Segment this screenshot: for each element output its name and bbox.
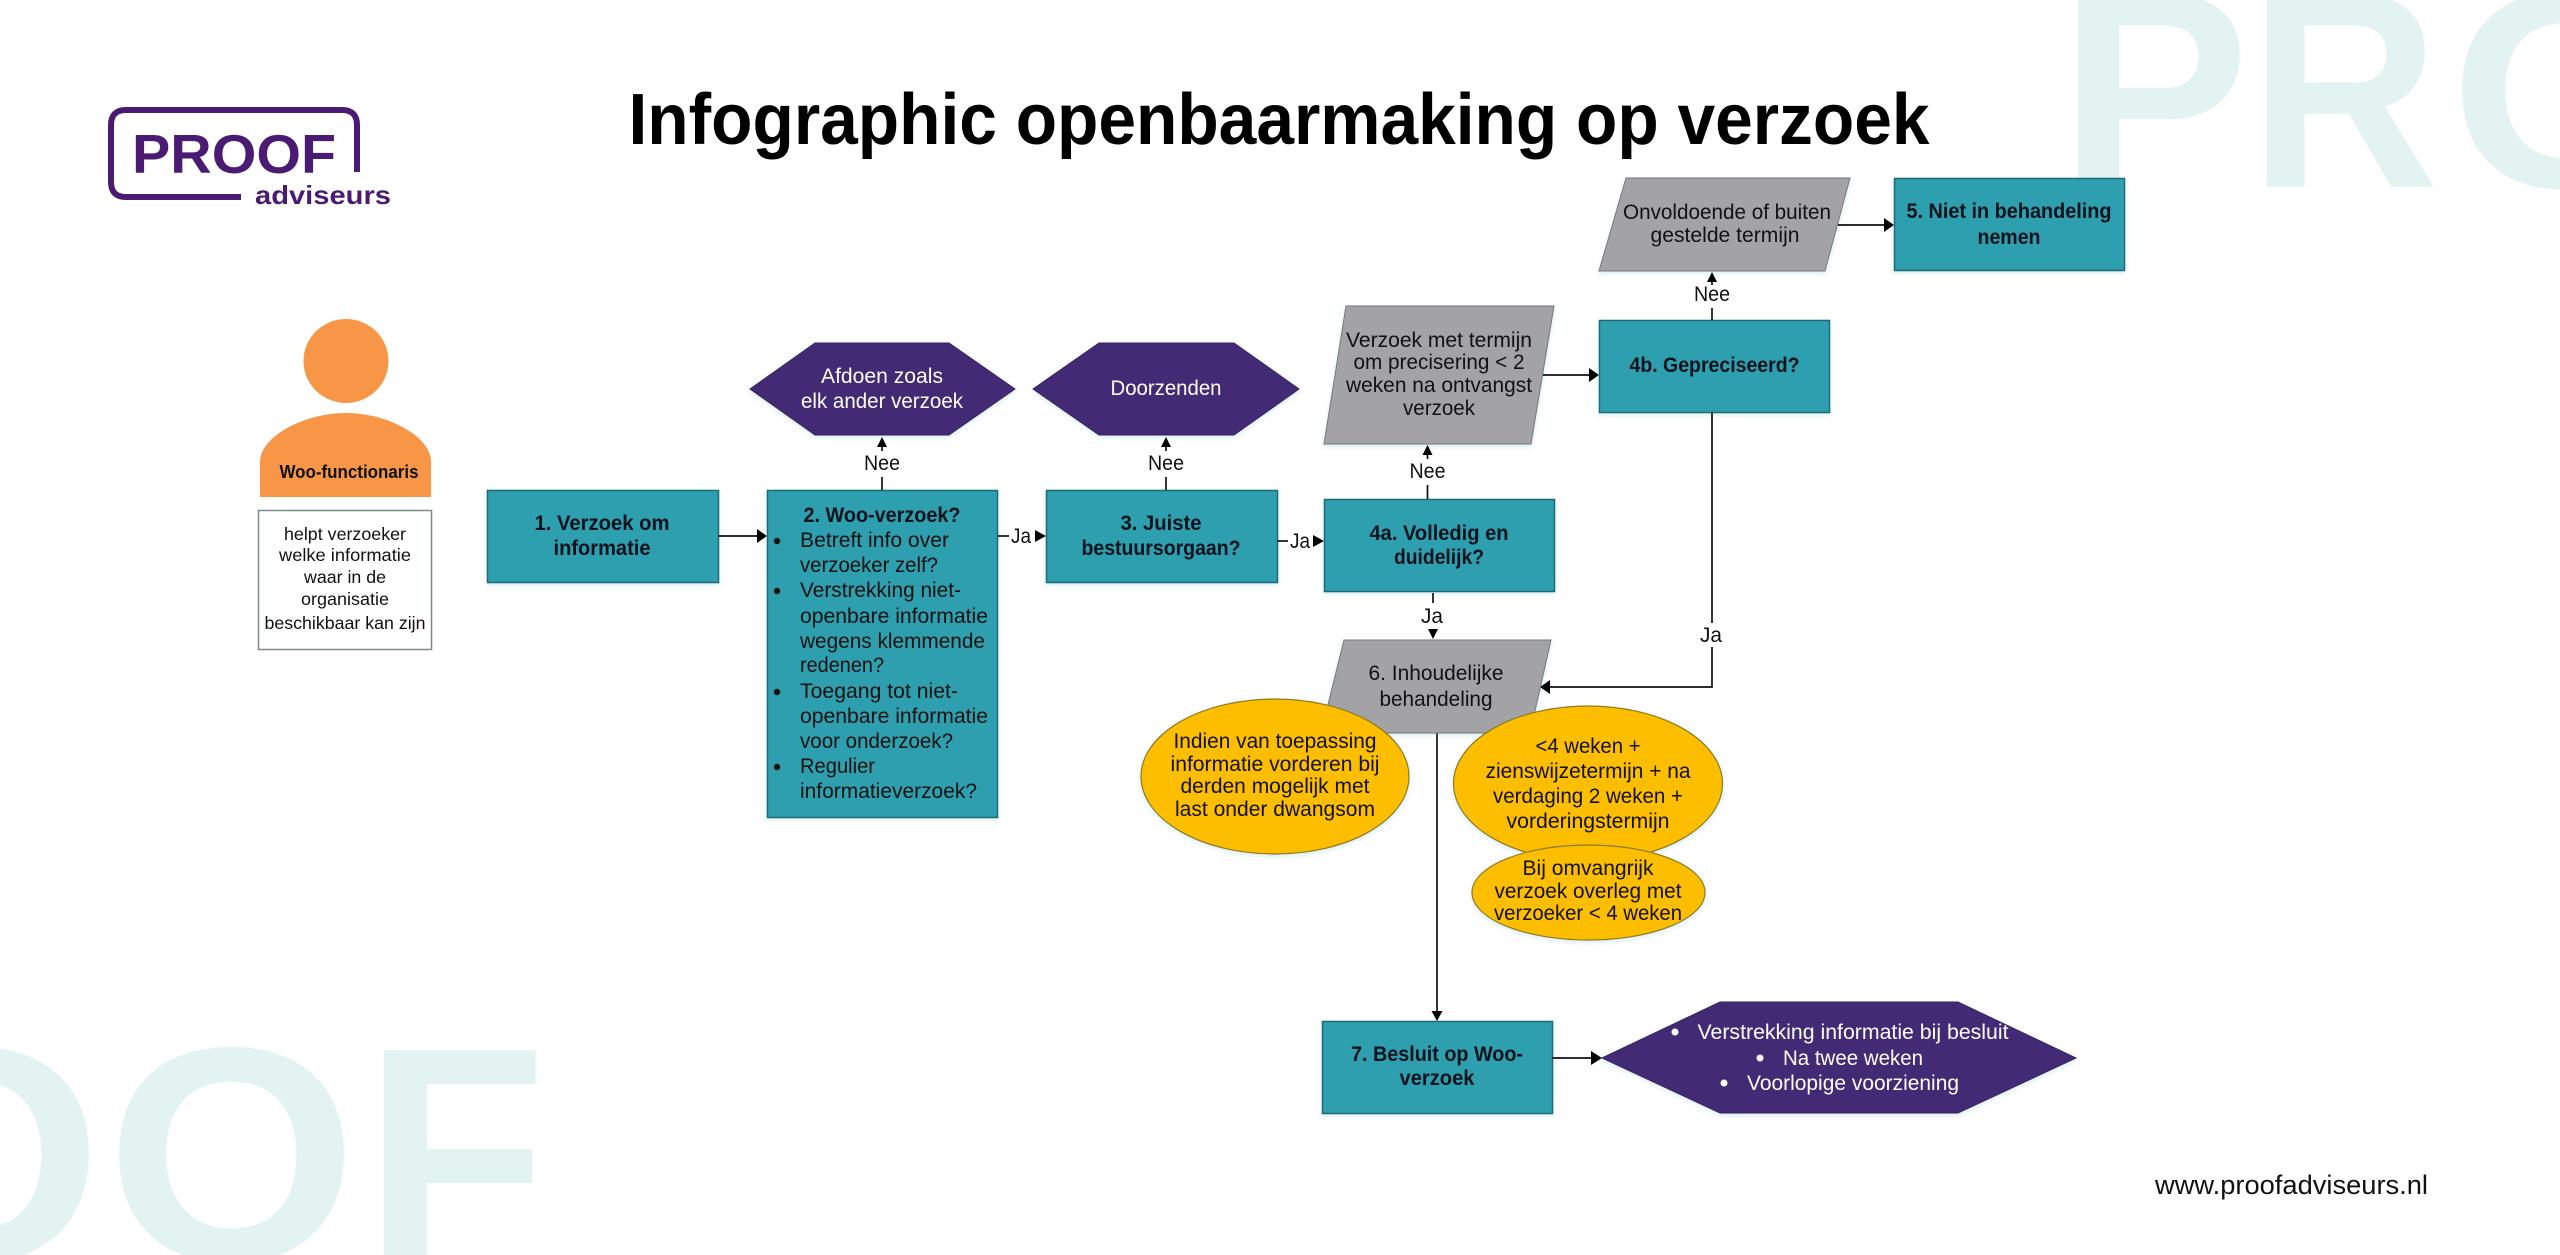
note: role of Woo-functionaris: helpt verzoeker (284, 524, 406, 544)
parallelogram: step 6 Inhoudelijke behandeling: behandeling (1380, 688, 1492, 711)
step 5: Niet in behandeling nemen: 5. Niet in behandeling (1906, 200, 2112, 223)
callout: informatie vorderen bij derden: informatie vorderen bij (1170, 753, 1380, 776)
parallelogram: Onvoldoende of buiten gestelde termijn: Onvoldoende of buiten (1623, 201, 1831, 224)
parallelogram: Onvoldoende of buiten gestelde termijn (1599, 178, 1850, 271)
note: role of Woo-functionaris: beschikbaar kan zijn (264, 613, 426, 633)
arrow: Nee from step 4a: Nee (1410, 460, 1446, 483)
callout: termijnen: <4 weken + (1536, 735, 1640, 758)
step 7: Besluit op Woo-verzoek (1322, 1022, 1552, 1114)
callout: termijnen: zienswijzetermijn + na (1486, 760, 1691, 783)
callout: informatie vorderen bij derden: last onder dwangsom (1175, 798, 1375, 821)
arrow: Ja from step 2 to step 3: Ja (1011, 525, 1031, 548)
criteria list: openbare informatie (800, 705, 988, 728)
parallelogram: Onvoldoende of buiten gestelde termijn: gestelde termijn (1650, 224, 1800, 247)
arrow: Ja from step 2 to step 3 (998, 525, 1046, 548)
hexagon: Doorzenden: Doorzenden (1110, 377, 1222, 400)
criteria list (774, 529, 988, 803)
criteria list: redenen? (800, 654, 884, 677)
step 1: Verzoek om informatie (488, 490, 718, 582)
step 4a: Volledig en duidelijk?: duidelijk? (1394, 546, 1484, 569)
arrow: Nee from step 2 (864, 437, 900, 490)
step 3: Juiste bestuursorgaan?: 3. Juiste (1120, 512, 1202, 535)
parallelogram: step 6 Inhoudelijke behandeling: 6. Inhoudelijke (1368, 662, 1504, 685)
callout: omvangrijk verzoek: verzoeker < 4 weken (1494, 902, 1682, 925)
icon: person body (260, 413, 431, 497)
arrow: Ja from step 3 to step 4a (1277, 530, 1324, 553)
criteria list: Regulier (800, 755, 875, 778)
parallelogram: step 6 Inhoudelijke behandeling (1321, 640, 1551, 733)
criteria list: wegens klemmende (799, 630, 985, 653)
step 4b: Gepreciseerd? (1600, 320, 1830, 412)
parallelogram: Verzoek met termijn om precisering (1324, 306, 1554, 444)
callout: termijnen: vorderingstermijn (1506, 810, 1670, 833)
logo: PROOF adviseurs (111, 110, 391, 210)
step 2: Woo-verzoek?: 2. Woo-verzoek? (804, 504, 960, 527)
arrow: Ja from step 3 to step 4a: Ja (1290, 530, 1310, 553)
note: role of Woo-functionaris (258, 510, 432, 650)
parallelogram: Verzoek met termijn om precisering: weken na ontvangst (1345, 374, 1532, 397)
criteria list: voor onderzoek? (800, 730, 953, 753)
hexagon: outcomes of decision: Na twee weken (1783, 1047, 1923, 1070)
parallelogram: Verzoek met termijn om precisering: verzoek (1403, 397, 1475, 420)
logo: PROOF adviseurs: PROOF (132, 123, 336, 185)
note: role of Woo-functionaris: waar in de (303, 567, 386, 587)
arrow: Ja from step 4b to step 6 (1540, 412, 1722, 694)
callout: informatie vorderen bij derden: Indien van toepassing (1174, 730, 1376, 753)
step 7: Besluit op Woo-verzoek: 7. Besluit op Woo- (1351, 1043, 1523, 1066)
criteria list: openbare informatie (800, 605, 988, 628)
step 1: Verzoek om informatie: 1. Verzoek om (534, 512, 670, 535)
hexagon: Doorzenden (1033, 343, 1299, 435)
step 3: Juiste bestuursorgaan?: bestuursorgaan? (1082, 537, 1240, 560)
arrow: Ja from step 4b to step 6: Ja (1700, 624, 1722, 647)
title: Infographic openbaarmaking op verzoek (628, 80, 1930, 160)
arrow: Ja from step 4a to step 6: Ja (1421, 605, 1443, 628)
icon: person head (304, 319, 388, 403)
parallelogram: Verzoek met termijn om precisering: om precisering < 2 (1354, 351, 1524, 374)
hexagon: outcomes of decision: Voorlopige voorziening (1747, 1072, 1959, 1095)
watermark: PRO top right (2059, 0, 2560, 192)
arrow: Nee from step 3 (1148, 437, 1184, 490)
criteria list: Verstrekking niet- (800, 579, 961, 602)
callout: informatie vorderen bij derden (1141, 699, 1409, 854)
step 5: Niet in behandeling nemen (1894, 178, 2124, 270)
logo: PROOF adviseurs: adviseurs (255, 180, 391, 210)
arrow: Nee from step 4b (1694, 272, 1730, 320)
arrow: Ja from step 4a to step 6 (1421, 593, 1443, 639)
hexagon: outcomes of decision: Verstrekking informatie bij besluit (1698, 1021, 2009, 1044)
step 4b: Gepreciseerd?: 4b. Gepreciseerd? (1630, 354, 1800, 377)
step 3: Juiste bestuursorgaan? (1046, 490, 1278, 582)
hexagon: Afdoen zoals elk ander verzoek (750, 343, 1015, 435)
actor name: Woo-functionaris (280, 462, 418, 482)
parallelogram: Verzoek met termijn om precisering: Verzoek met termijn (1346, 329, 1532, 352)
arrow: to step 5 (1838, 218, 1894, 232)
callout: termijnen: verdaging 2 weken + (1493, 785, 1683, 808)
step 4a: Volledig en duidelijk? (1324, 500, 1554, 592)
callout: omvangrijk verzoek: Bij omvangrijk (1522, 857, 1654, 880)
website url: www.proofadviseurs.nl (2154, 1170, 2428, 1200)
callout: omvangrijk verzoek: verzoek overleg met (1494, 880, 1682, 903)
arrow: step 1 to step 2 (718, 529, 767, 543)
step 4a: Volledig en duidelijk?: 4a. Volledig en (1370, 522, 1508, 545)
step 7: Besluit op Woo-verzoek: verzoek (1400, 1067, 1475, 1090)
arrow: step 6 to step 7 (1432, 733, 1442, 1021)
note: role of Woo-functionaris: organisatie (301, 589, 389, 609)
step 2: Woo-verzoek? (768, 490, 998, 818)
criteria list: informatieverzoek? (800, 780, 977, 803)
hexagon: Afdoen zoals elk ander verzoek: elk ander verzoek (801, 390, 963, 413)
callout: termijnen (1454, 706, 1722, 861)
hexagon: outcomes of decision (1602, 1002, 2076, 1113)
arrow: precisering to step 4b (1543, 368, 1599, 382)
actor: Woo-functionaris (260, 319, 431, 497)
criteria list: verzoeker zelf? (800, 554, 938, 577)
criteria list: Toegang tot niet- (800, 680, 958, 703)
arrow: Nee from step 4b: Nee (1694, 283, 1730, 306)
step 1: Verzoek om informatie: informatie (554, 537, 650, 560)
watermark: OOF bottom left (0, 1040, 536, 1255)
step 5: Niet in behandeling nemen: nemen (1978, 226, 2040, 249)
callout: omvangrijk verzoek (1472, 845, 1705, 940)
arrow: step 7 to outcome (1552, 1051, 1602, 1065)
arrow: Nee from step 4a (1410, 445, 1446, 499)
callout: informatie vorderen bij derden: derden mogelijk met (1180, 775, 1370, 798)
criteria list: Betreft info over (800, 529, 949, 552)
arrow: Nee from step 3: Nee (1148, 452, 1184, 475)
note: role of Woo-functionaris: welke informatie (278, 545, 411, 565)
hexagon: Afdoen zoals elk ander verzoek: Afdoen zoals (821, 365, 943, 388)
arrow: Nee from step 2: Nee (864, 452, 900, 475)
